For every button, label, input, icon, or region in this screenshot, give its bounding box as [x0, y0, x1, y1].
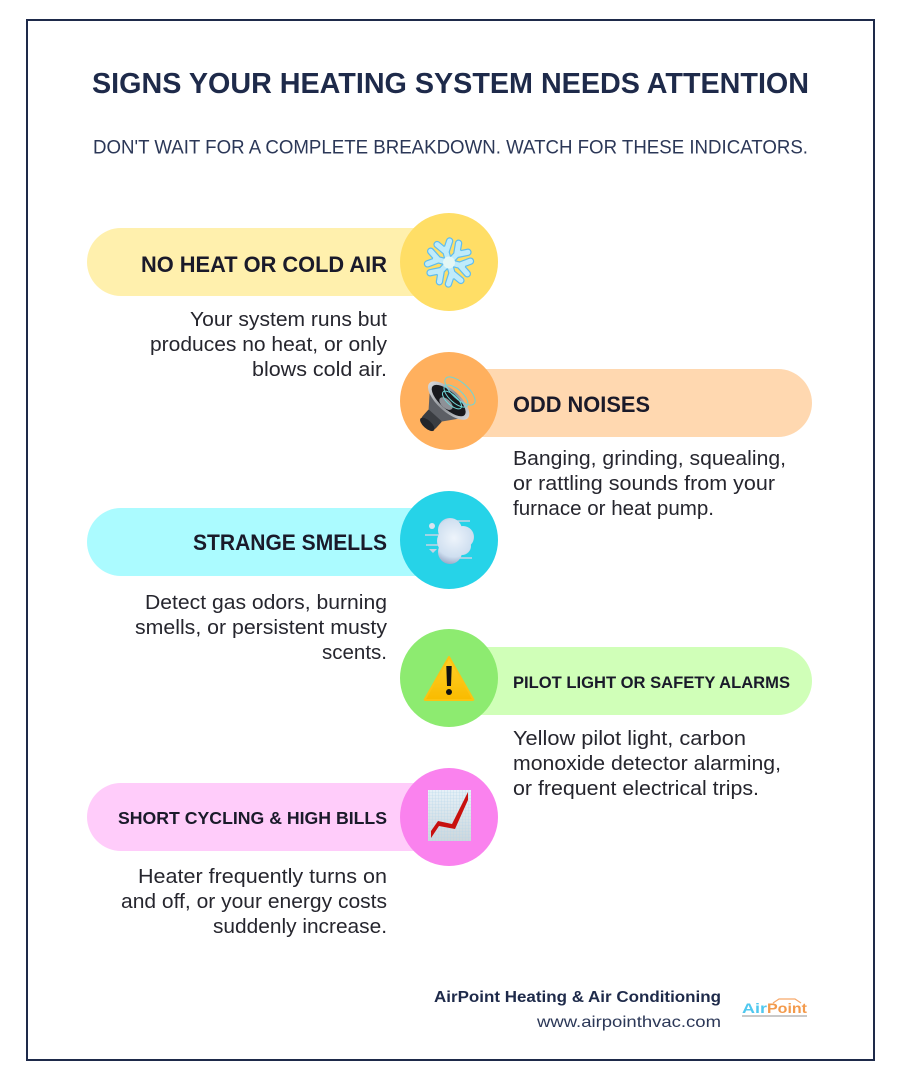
footer website: www.airpointhvac.com	[536, 1014, 721, 1031]
description: strange smells: Detect gas odors, burning	[145, 592, 387, 614]
circle: odd noises	[400, 352, 498, 450]
item: no heat or cold air	[87, 213, 498, 381]
pill: short cycling	[87, 783, 487, 851]
logo: Air	[742, 1000, 768, 1016]
description: strange smells	[135, 592, 387, 664]
pill: no heat	[87, 228, 487, 296]
heading: odd noises: ODD NOISES	[513, 392, 650, 417]
description: short cycling: and off, or your energy costs	[121, 891, 387, 913]
icon: speaker	[405, 372, 479, 445]
pill: strange smells	[87, 508, 487, 576]
description: odd noises: Banging, grinding, squealing,	[513, 448, 786, 470]
circle: no heat	[400, 213, 498, 311]
description: pilot light: monoxide detector alarming,	[513, 753, 781, 775]
item: odd noises	[400, 352, 812, 520]
description: short cycling: Heater frequently turns on	[138, 866, 387, 888]
description: no heat: blows cold air.	[252, 359, 387, 381]
heading: pilot light: PILOT LIGHT OR SAFETY ALARMS	[513, 674, 790, 692]
heading: short cycling: SHORT CYCLING & HIGH BILLS	[118, 808, 387, 828]
description: odd noises	[513, 448, 786, 520]
description: no heat: produces no heat, or only	[150, 334, 387, 356]
item: short cycling and high bills	[87, 768, 498, 938]
item: strange smells	[87, 491, 498, 664]
item: pilot light or safety alarms	[400, 629, 812, 800]
description: short cycling: suddenly increase.	[213, 916, 387, 938]
description: pilot light	[513, 728, 781, 800]
footer company name: AirPoint Heating & Air Conditioning	[434, 989, 721, 1006]
logo: Point	[767, 1000, 807, 1016]
description: no heat: Your system runs but	[190, 309, 387, 331]
subtitle: DON'T WAIT FOR A COMPLETE BREAKDOWN. WATCH FOR THESE INDICATORS.	[93, 138, 808, 158]
description: pilot light: Yellow pilot light, carbon	[513, 728, 746, 750]
icon: warning sign	[425, 657, 473, 700]
logo	[742, 999, 807, 1017]
description: no heat	[150, 309, 387, 381]
circle: pilot light	[400, 629, 498, 727]
description: odd noises: or rattling sounds from your	[513, 473, 775, 495]
icon: puff of smoke	[425, 518, 474, 564]
description: short cycling	[121, 866, 387, 938]
description: pilot light: or frequent electrical trips.	[513, 778, 759, 800]
icon: rising chart	[428, 790, 471, 841]
pill: odd noises	[412, 369, 812, 437]
circle: strange smells	[400, 491, 498, 589]
heading: no heat: NO HEAT OR COLD AIR	[141, 252, 387, 277]
description: odd noises: furnace or heat pump.	[513, 498, 714, 520]
description: strange smells: smells, or persistent musty	[135, 617, 387, 639]
icon: snowflake	[423, 237, 475, 288]
description: strange smells: scents.	[322, 642, 387, 664]
title: SIGNS YOUR HEATING SYSTEM NEEDS ATTENTION	[92, 68, 809, 100]
pill: pilot light	[412, 647, 812, 715]
heading: strange smells: STRANGE SMELLS	[193, 530, 387, 555]
circle: short cycling	[400, 768, 498, 866]
